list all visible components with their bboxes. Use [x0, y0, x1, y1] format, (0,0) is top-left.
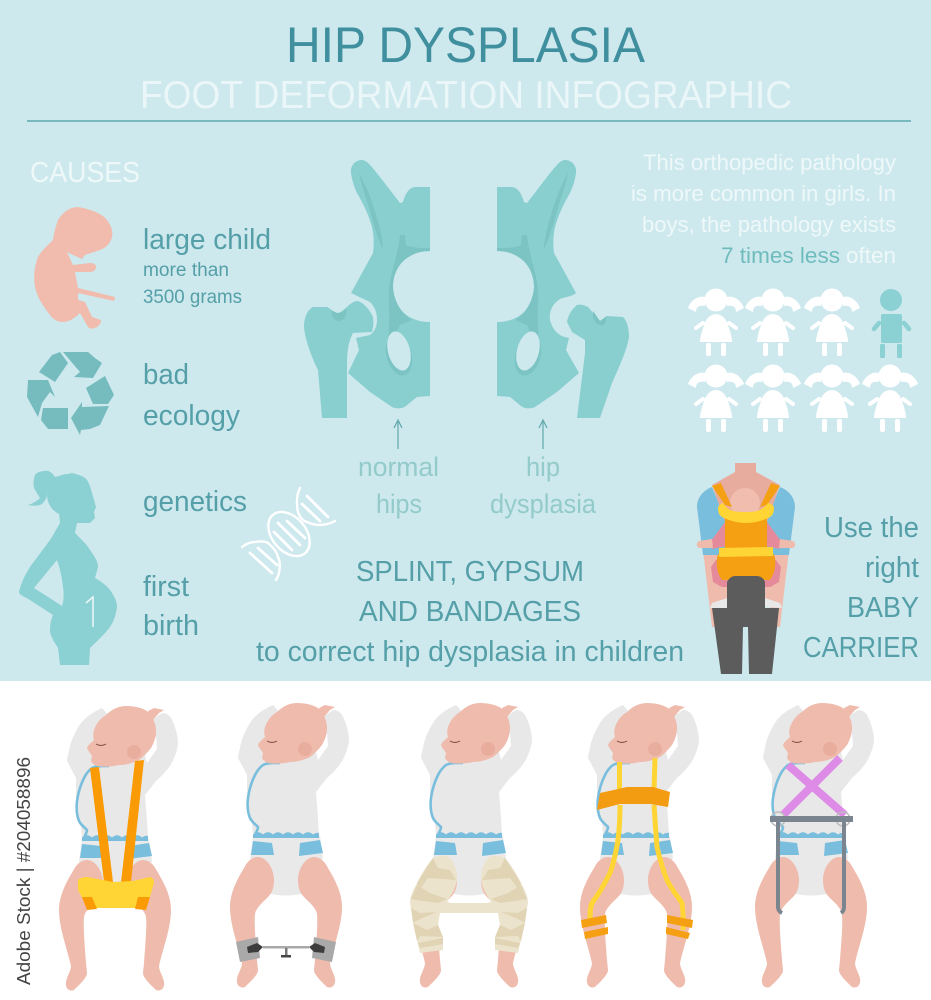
chart: normal hip	[304, 160, 430, 418]
text: first birth: birth	[143, 610, 199, 642]
label: normal hips: hips	[376, 489, 422, 519]
heading: treatment: AND BANDAGES	[359, 596, 581, 628]
text: large child	[143, 224, 271, 308]
label: normal hips	[358, 452, 439, 519]
chart: dysplastic hip	[497, 160, 629, 418]
baby arms	[711, 522, 781, 549]
chart: girls to boys pictogram	[688, 288, 918, 432]
text: pathology statistic: often	[846, 243, 896, 268]
baby 1: orange pavlik harness	[59, 706, 178, 991]
label: hip dysplasia: hip	[526, 452, 560, 482]
mother neck and chest	[712, 463, 780, 530]
arrow: hip dysplasia	[539, 420, 547, 449]
background panel	[0, 0, 931, 681]
arrow: normal hips	[394, 420, 402, 449]
pelvis left	[348, 160, 430, 408]
text: baby carrier: BABY	[847, 592, 919, 624]
pelvis right	[497, 160, 579, 408]
baby 2: ankle brace	[230, 703, 349, 988]
femur left	[304, 301, 373, 418]
text: pathology statistic: 7 times less	[721, 243, 840, 268]
text: pathology statistic: boys, the pathology exists	[642, 212, 896, 237]
icon: recycle	[27, 352, 114, 435]
stock id vertical text: Adobe Stock | #204058896	[14, 757, 34, 985]
text: baby carrier	[803, 512, 919, 664]
baby shoes	[710, 598, 782, 608]
mother shirt	[697, 487, 795, 555]
text: large child: more than	[143, 260, 229, 281]
heading: causes: CAUSES	[30, 157, 140, 189]
text: baby carrier: right	[865, 552, 919, 584]
femur right	[567, 305, 629, 418]
mother skin arms	[703, 550, 789, 627]
text: first birth: first	[143, 571, 189, 603]
baby 4: abduction straps	[580, 703, 699, 988]
subtitle: FOOT DEFORMATION INFOGRAPHIC	[140, 74, 792, 117]
icon: fetus	[34, 207, 115, 329]
text: first birth	[143, 571, 199, 642]
heading: treatment: SPLINT, GYPSUM	[356, 556, 584, 588]
panel: causes	[19, 157, 271, 665]
mother trousers	[712, 576, 779, 674]
label: hip dysplasia	[490, 452, 597, 519]
baby 5: metal spreader with cross straps	[755, 703, 874, 988]
text: baby carrier: Use the	[824, 512, 919, 544]
text: bad ecology	[143, 359, 240, 432]
text: bad ecology: bad	[143, 359, 189, 391]
icon: boy	[874, 289, 909, 358]
text: pathology statistic: is more common in girls. In	[631, 181, 896, 206]
text: pathology statistic: This orthopedic pathology	[643, 150, 896, 175]
text: large child: large child	[143, 224, 271, 256]
text: pathology statistic	[631, 150, 896, 268]
heading: treatment: to correct hip dysplasia in children	[256, 636, 684, 668]
icon: pregnant woman	[19, 471, 117, 665]
heading: treatment	[256, 556, 684, 668]
baby 3: bandages	[410, 703, 532, 988]
icon: dna	[242, 488, 335, 580]
text: large child: 3500 grams	[143, 287, 242, 308]
text: bad ecology: ecology	[143, 400, 240, 432]
title: HIP DYSPLASIA	[286, 17, 646, 73]
text: genetics: genetics	[143, 486, 247, 518]
text: baby carrier: CARRIER	[803, 632, 919, 664]
label: normal hips: normal	[358, 452, 439, 482]
carrier	[712, 483, 780, 580]
illustration: baby carrier	[697, 463, 795, 674]
label: hip dysplasia: dysplasia	[490, 489, 597, 519]
baby legs	[711, 560, 781, 590]
